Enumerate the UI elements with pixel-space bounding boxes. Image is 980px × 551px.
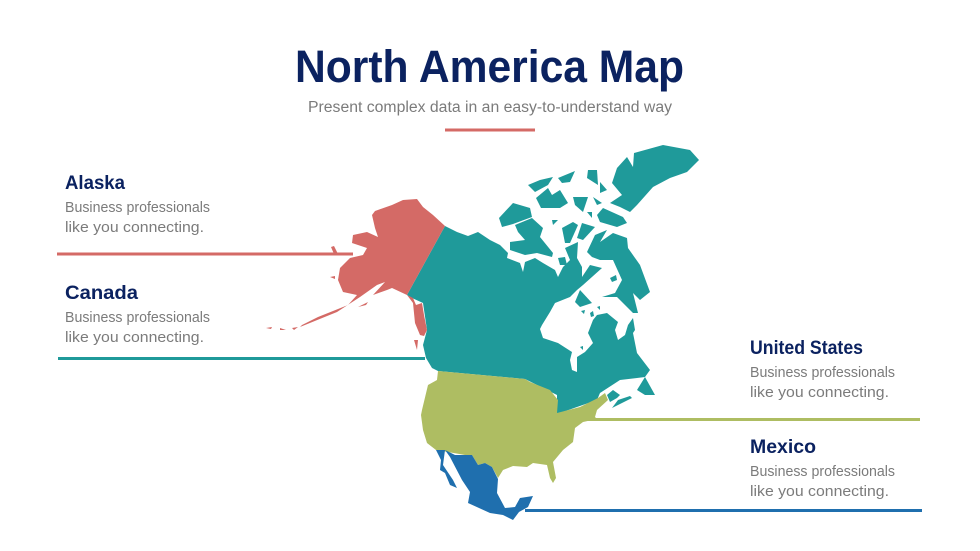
Alaskan islands — [266, 246, 368, 330]
Alaska panhandle — [407, 295, 427, 350]
Arctic islands — [499, 170, 627, 265]
subtitle: Present complex data in an easy-to-understand way — [308, 99, 672, 116]
body text line 2: like you connecting. — [65, 329, 204, 346]
body text line 2: like you connecting. — [65, 219, 204, 236]
body text line 2: like you connecting. — [750, 384, 889, 401]
leader line — [58, 357, 425, 360]
map of North America — [266, 145, 699, 520]
body text line 1: Business professionals — [65, 309, 210, 326]
leader line — [525, 509, 922, 512]
callout: Mexico — [525, 437, 922, 512]
heading: Mexico — [750, 437, 816, 458]
body text line 2: like you connecting. — [750, 483, 889, 500]
Ellesmere Island — [610, 145, 699, 212]
leader line — [585, 418, 920, 421]
region: Canada — [407, 145, 699, 414]
heading: Alaska — [65, 173, 125, 194]
callout: Canada — [58, 283, 425, 360]
header — [295, 41, 684, 132]
Newfoundland — [637, 377, 655, 395]
Baffin Island — [587, 230, 650, 313]
body text line 1: Business professionals — [750, 463, 895, 480]
Mexico mainland — [445, 450, 533, 520]
small bay islands — [580, 275, 617, 350]
leader line — [57, 252, 353, 256]
region: Alaska — [300, 199, 445, 327]
Canadian mainland — [407, 226, 650, 414]
region: United States — [421, 371, 608, 483]
callout: Alaska — [57, 173, 353, 256]
callout: United States — [585, 338, 920, 421]
Baja California — [436, 450, 457, 488]
Nova Scotia — [612, 396, 632, 408]
body text line 1: Business professionals — [750, 364, 895, 381]
title accent rule — [445, 128, 535, 132]
New Brunswick — [607, 390, 620, 402]
region: Mexico — [436, 450, 533, 520]
Southampton Island — [575, 290, 592, 307]
title: North America Map — [295, 41, 684, 92]
heading: Canada — [65, 283, 138, 304]
heading: United States — [750, 338, 863, 359]
body text line 1: Business professionals — [65, 199, 210, 216]
